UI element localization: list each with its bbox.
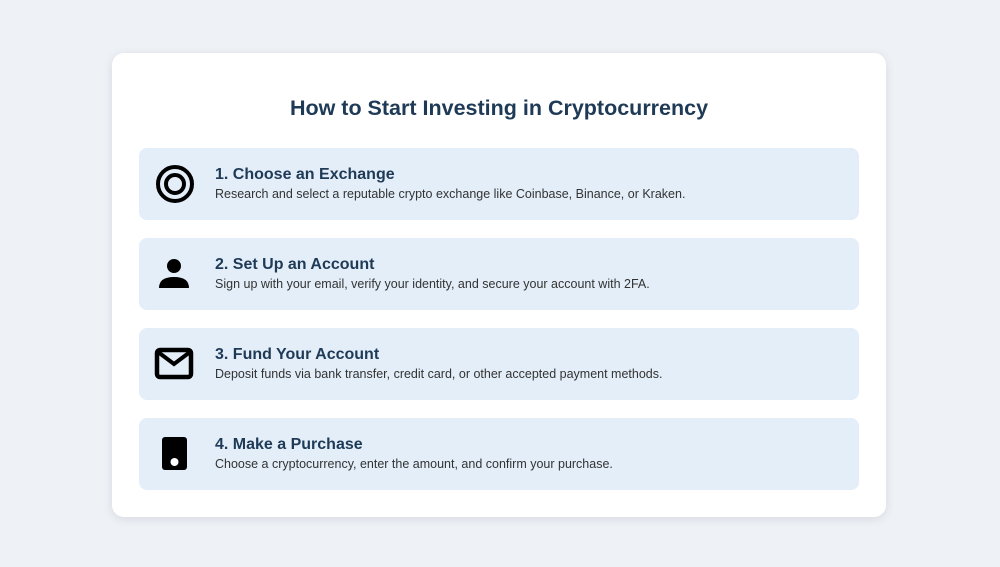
heading 4: 4. Make a Purchase bbox=[215, 436, 363, 453]
icon: envelope bbox=[154, 348, 194, 380]
icon: person bbox=[159, 259, 189, 288]
title: How to Start Investing in Cryptocurrency bbox=[290, 96, 708, 120]
desc 4: Choose a cryptocurrency, enter the amount, and confirm your purchase. bbox=[215, 457, 613, 471]
desc 3: Deposit funds via bank transfer, credit card, or other accepted payment methods. bbox=[215, 367, 662, 381]
step 4 bbox=[139, 418, 859, 490]
step 2 bbox=[139, 238, 859, 310]
desc 2: Sign up with your email, verify your identity, and secure your account with 2FA. bbox=[215, 277, 650, 291]
card bbox=[112, 53, 886, 517]
desc 1: Research and select a reputable crypto exchange like Coinbase, Binance, or Kraken. bbox=[215, 187, 685, 201]
heading 3: 3. Fund Your Account bbox=[215, 346, 379, 363]
heading 1: 1. Choose an Exchange bbox=[215, 166, 395, 183]
heading 2: 2. Set Up an Account bbox=[215, 256, 374, 273]
icon: device bbox=[162, 437, 187, 470]
icon: target bbox=[156, 165, 194, 203]
step 3 bbox=[139, 328, 859, 400]
step 1 bbox=[139, 148, 859, 220]
